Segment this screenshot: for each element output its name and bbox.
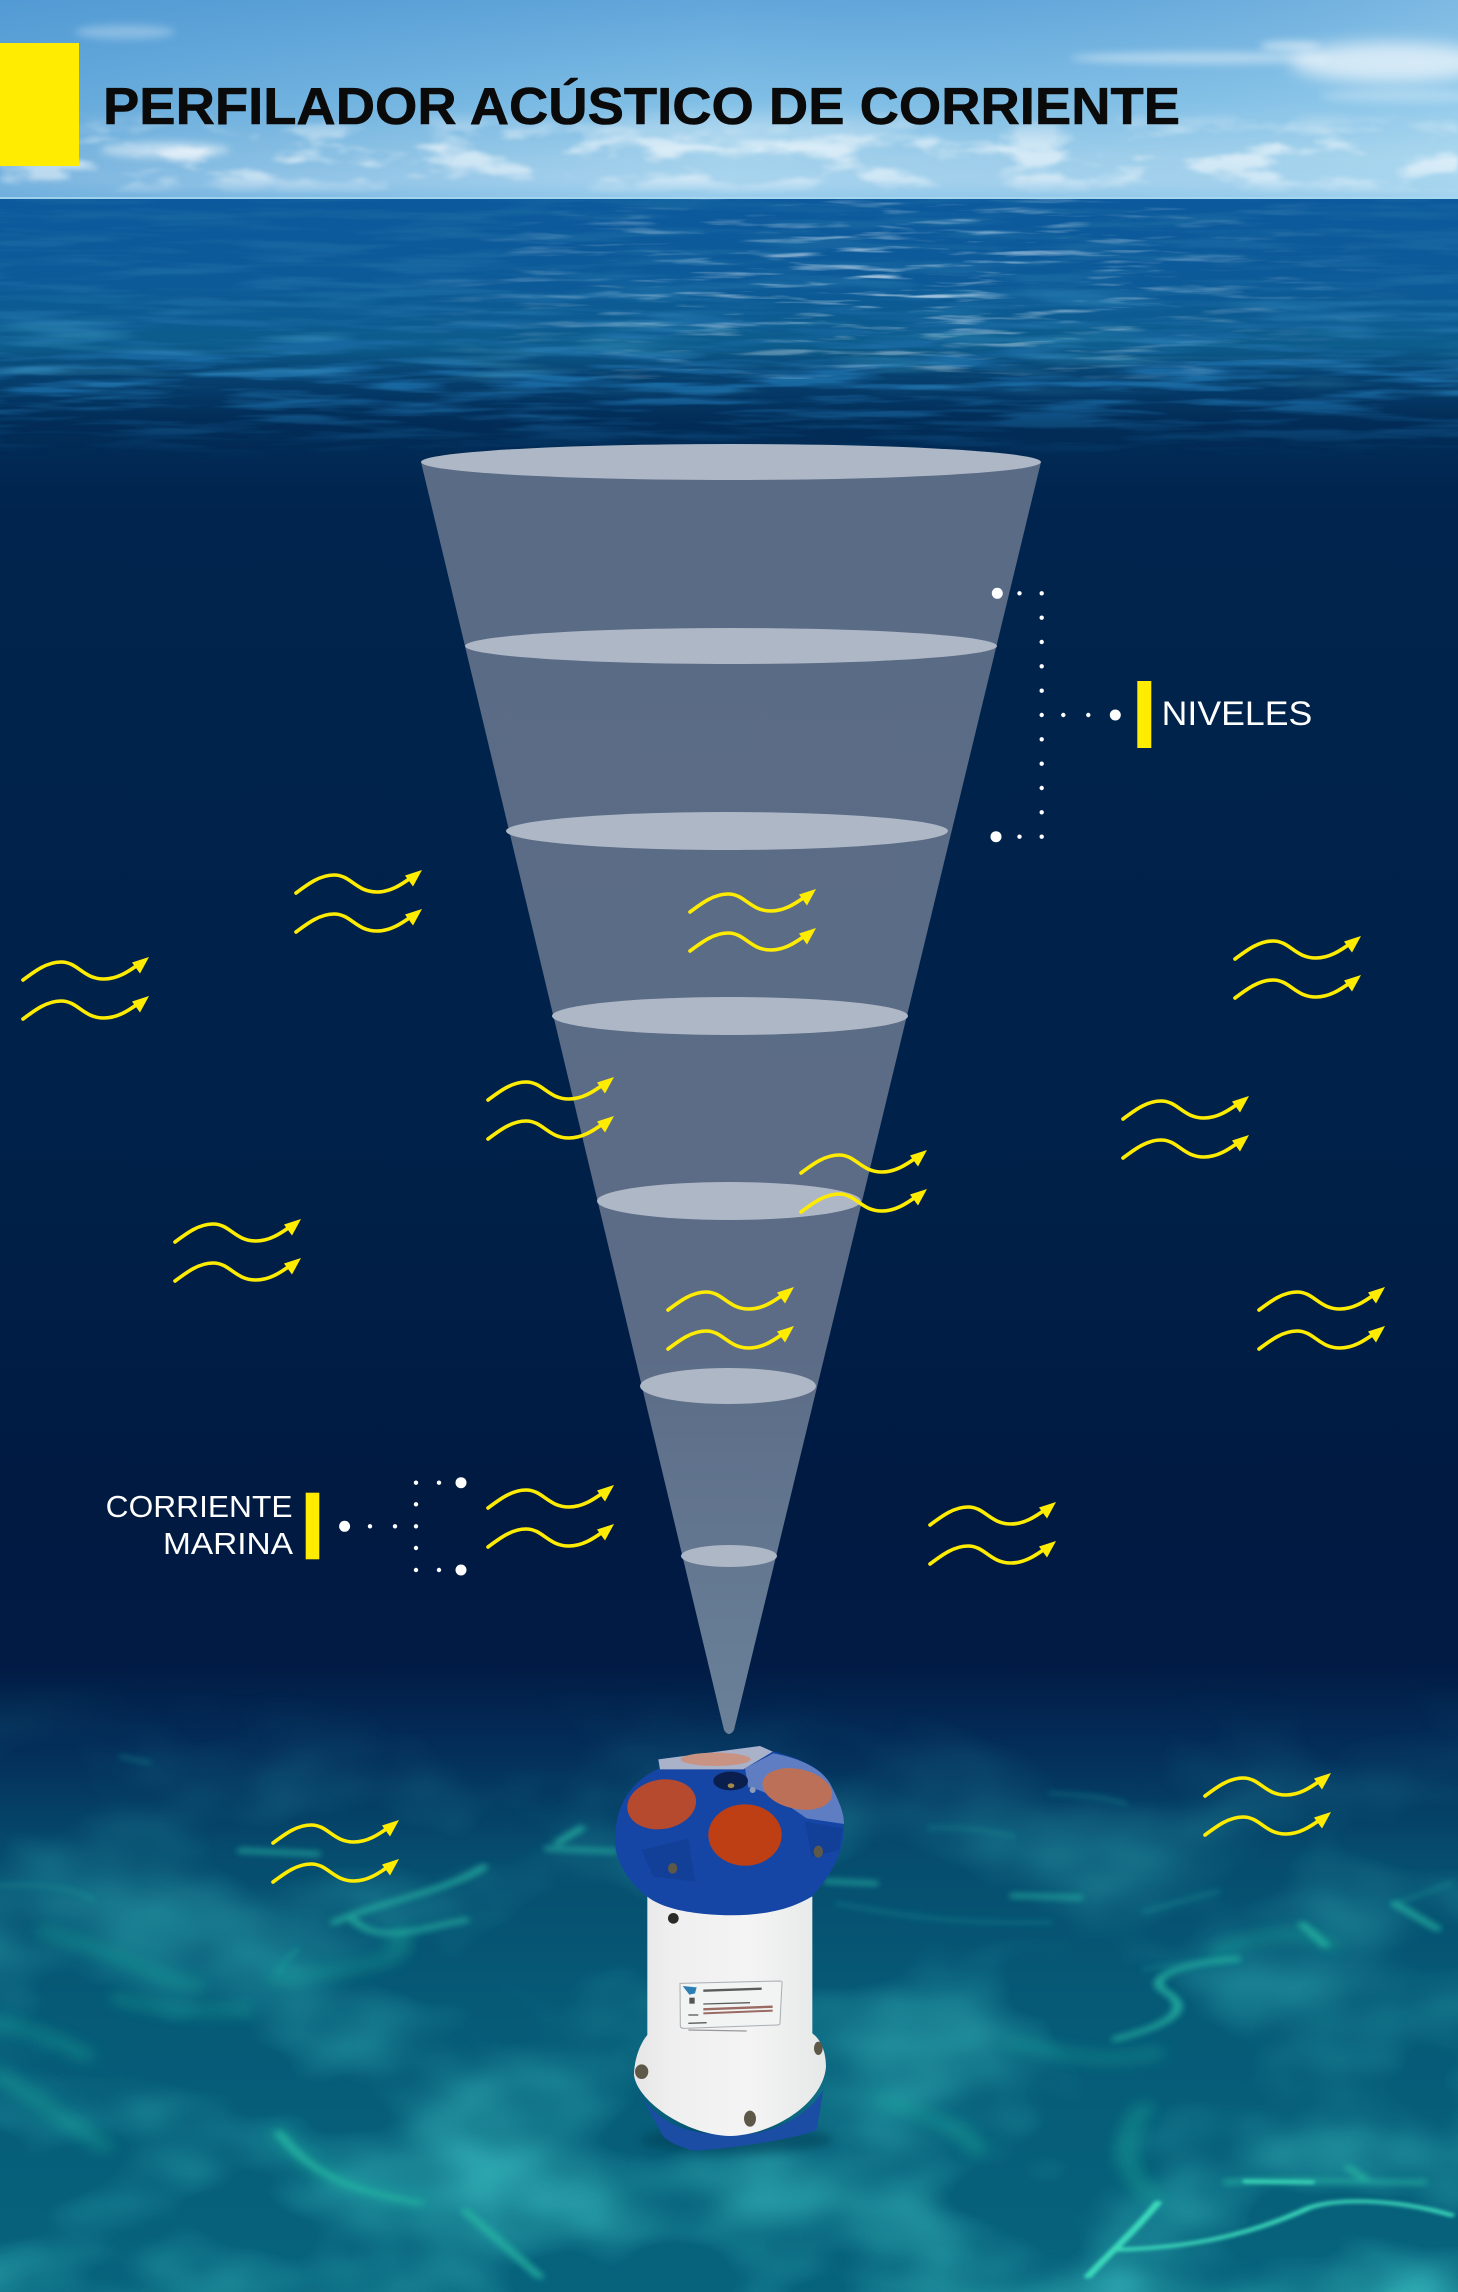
background: sky [0,0,1458,199]
current arrows [1259,1287,1385,1349]
callout: niveles [990,588,1312,842]
current arrows [1123,1096,1249,1158]
current arrows [273,1820,399,1882]
label text [106,1489,293,1561]
transducer faces [681,1753,751,1766]
white body [634,1897,826,2136]
instrument: current profiler [615,1746,844,2153]
callout: corriente marina [106,1477,466,1576]
dotted bracket [990,588,1121,842]
shadow [640,2127,833,2153]
level ellipses [421,444,1041,1567]
beam cone [421,462,1041,1734]
center port [713,1772,748,1790]
current arrows [23,957,149,1019]
label marker [306,1493,319,1559]
current arrows [801,1150,927,1212]
blue transducer head [615,1746,844,1915]
product label [680,1981,782,2031]
current arrows [690,889,816,951]
current arrows [488,1485,614,1547]
base ring [637,2090,823,2151]
label text: CORRIENTE [106,1489,292,1524]
bolts [635,1846,823,2127]
current arrows [296,870,422,932]
current arrows [1235,936,1361,998]
current arrows [668,1287,794,1349]
acoustic beam cone with depth levels [421,444,1041,1734]
current arrows [930,1502,1056,1564]
side notches [642,1838,695,1882]
title: PERFILADOR ACÚSTICO DE CORRIENTE [103,78,1180,136]
title marker: yellow block [0,43,79,166]
label marker [1137,681,1151,748]
current arrows [175,1219,301,1281]
label text: MARINA [163,1526,293,1561]
dotted bracket [339,1477,466,1576]
current arrows [1205,1773,1331,1835]
light faces of head [658,1746,773,1769]
current arrows [488,1077,614,1139]
label text: NIVELES [1162,695,1312,733]
